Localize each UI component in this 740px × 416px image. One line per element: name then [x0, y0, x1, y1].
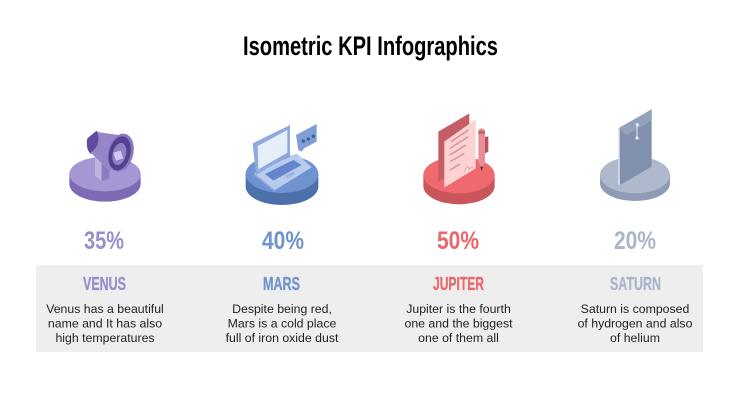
text: Jupiter description: one and the biggest — [404, 316, 513, 330]
heading: Mars: MARS — [263, 274, 300, 294]
icon: envelope on disc — [600, 109, 670, 201]
grey band — [36, 265, 703, 352]
text: Jupiter description: one of them all — [418, 331, 499, 345]
stat: Jupiter 50%: 50% — [437, 227, 479, 255]
icon: laptop on disc — [246, 124, 318, 205]
text: Jupiter description: Jupiter is the fourth — [406, 302, 511, 316]
text: Mars description — [226, 302, 339, 345]
heading: Jupiter: JUPITER — [433, 274, 484, 294]
text: Jupiter description — [404, 302, 513, 345]
icon: megaphone on disc — [69, 131, 141, 202]
stat: Venus 35%: 35% — [84, 227, 124, 255]
text: Saturn description: Saturn is composed — [581, 302, 689, 316]
text: Saturn description — [578, 302, 693, 345]
text: Venus description: high temperatures — [55, 331, 155, 345]
heading: Saturn: SATURN — [610, 274, 661, 294]
text: Saturn description: of helium — [610, 331, 660, 345]
text: Venus description: name and It has also — [48, 316, 162, 330]
stat: Saturn 20%: 20% — [614, 227, 656, 255]
stat: Mars 40%: 40% — [262, 227, 304, 255]
title: Isometric KPI Infographics — [243, 31, 498, 61]
text: Mars description: full of iron oxide dust — [226, 331, 339, 345]
heading: Venus: VENUS — [83, 274, 126, 294]
text: Mars description: Mars is a cold place — [228, 316, 336, 330]
text: Venus description: Venus has a beautiful — [46, 302, 164, 316]
text: Venus description — [46, 302, 164, 345]
icon: document and pen on disc — [423, 113, 495, 204]
text: Mars description: Despite being red, — [232, 302, 332, 316]
text: Saturn description: of hydrogen and also — [578, 316, 693, 330]
